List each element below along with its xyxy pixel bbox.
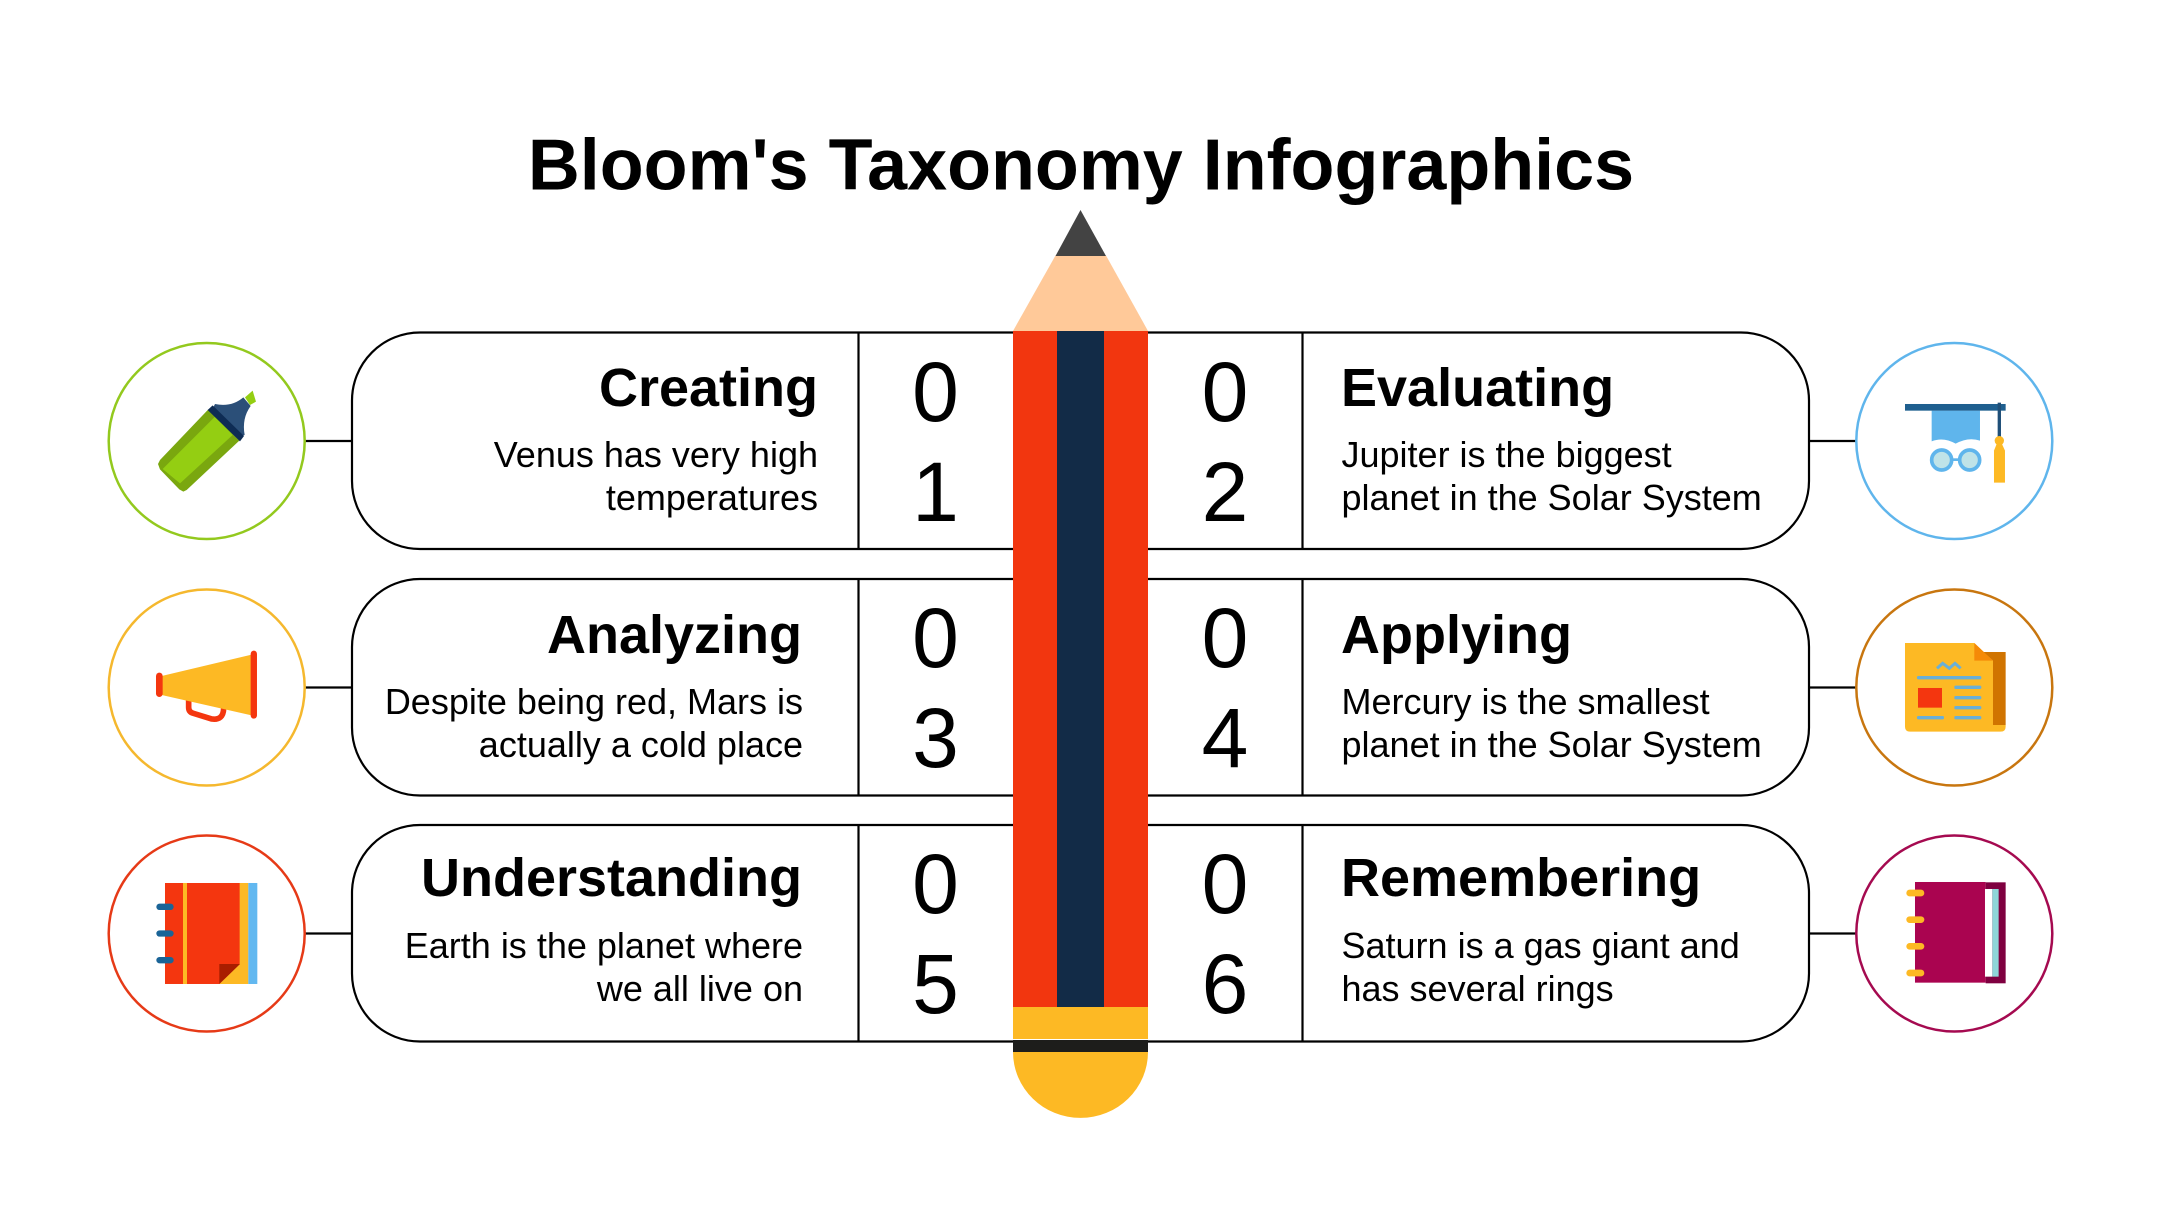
text: applying description: Mercury is the smallest bbox=[1342, 681, 1710, 722]
pencil bbox=[1013, 210, 1148, 1118]
panel: row 3 understanding and remembering bbox=[352, 825, 1809, 1042]
heading: creating: Creating bbox=[599, 358, 818, 418]
connector lines bbox=[305, 441, 1856, 934]
heading: understanding: Understanding bbox=[421, 848, 802, 908]
text: analyzing description: actually a cold place bbox=[479, 724, 803, 765]
icon: highlighter in green circle bbox=[109, 343, 305, 539]
number 01: 1 bbox=[912, 445, 959, 539]
icon: graduation cap and glasses in blue circle bbox=[1856, 343, 2052, 539]
number 06: 6 bbox=[1202, 937, 1248, 1031]
number 04: 4 bbox=[1202, 691, 1248, 785]
heading: applying: Applying bbox=[1341, 605, 1572, 665]
number 01: 0 bbox=[912, 345, 959, 439]
heading: analyzing: Analyzing bbox=[547, 605, 802, 665]
text: analyzing description: Despite being red, Mars is bbox=[385, 681, 803, 722]
text: understanding description: Earth is the planet where bbox=[405, 925, 803, 966]
panel: row 2 analyzing and applying bbox=[352, 579, 1809, 796]
icon: newspaper in orange circle bbox=[1856, 590, 2052, 786]
number 04: 0 bbox=[1202, 591, 1248, 685]
text: remembering description: has several rings bbox=[1342, 968, 1614, 1009]
text: applying description: planet in the Solar System bbox=[1342, 724, 1762, 765]
icon: magenta book in magenta circle bbox=[1856, 836, 2052, 1032]
icon: red notebook in red circle bbox=[109, 836, 305, 1032]
number 05: 0 bbox=[912, 837, 959, 931]
number 06: 0 bbox=[1202, 837, 1248, 931]
title: Bloom's Taxonomy Infographics bbox=[528, 126, 1634, 206]
number 03: 0 bbox=[912, 591, 959, 685]
text: remembering description: Saturn is a gas giant and bbox=[1342, 925, 1740, 966]
text: evaluating description: Jupiter is the biggest bbox=[1342, 434, 1672, 475]
text: creating description: temperatures bbox=[606, 477, 818, 518]
text: evaluating description: planet in the Solar System bbox=[1342, 477, 1762, 518]
number 03: 3 bbox=[912, 691, 959, 785]
text: creating description: Venus has very high bbox=[494, 434, 818, 475]
number 02: 2 bbox=[1202, 445, 1248, 539]
panel: row 1 creating and evaluating bbox=[352, 332, 1809, 549]
heading: remembering: Remembering bbox=[1341, 848, 1701, 908]
text: understanding description: we all live on bbox=[596, 968, 803, 1009]
number 05: 5 bbox=[912, 937, 959, 1031]
number 02: 0 bbox=[1202, 345, 1248, 439]
heading: evaluating: Evaluating bbox=[1341, 358, 1614, 418]
icon: megaphone in yellow circle bbox=[109, 590, 305, 786]
